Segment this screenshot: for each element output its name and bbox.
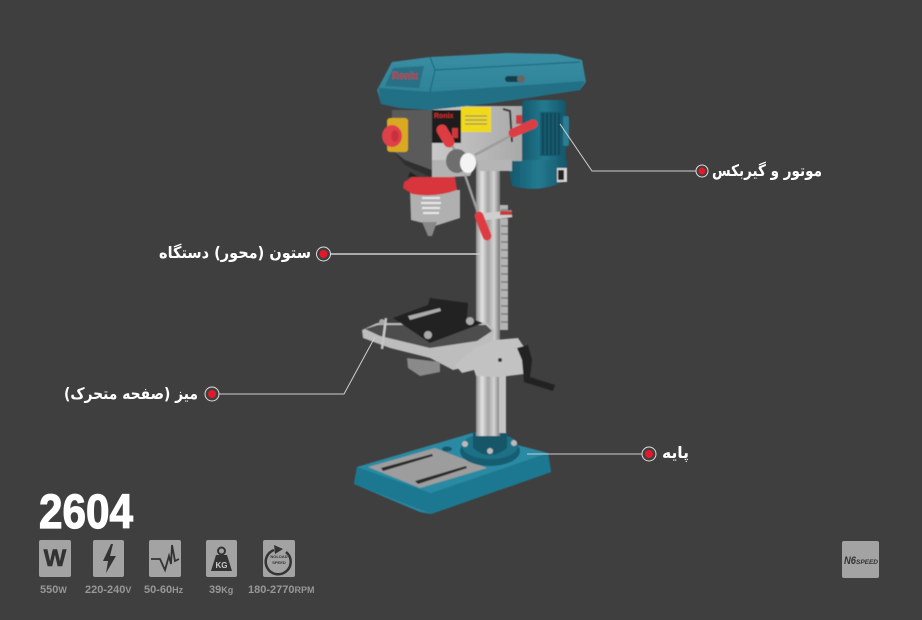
badge: N6 speed [842,541,879,578]
spec: weight: 39Kg [209,584,233,596]
spec: power [39,540,71,596]
callout: column: ستون (محور) دستگاه [159,243,311,262]
badge: N6 speed: N6 [844,555,857,567]
callout: table: میز (صفحه متحرک) [64,384,198,403]
spec: power: 550W [40,584,67,596]
model number: 2604 [39,486,133,539]
spec: power: W [44,545,67,572]
switch [382,118,408,152]
top cover: Ronix [392,71,418,82]
warning labels: Ronix [434,113,454,120]
head body [392,106,522,178]
drill press product illustration [354,53,586,514]
chuck [403,172,460,236]
logo [385,66,424,88]
top cover [377,53,586,110]
callout: base: پایه [662,443,689,463]
spec: speed: NOLOAD [270,554,288,559]
base [354,432,551,514]
table and vise [362,298,555,391]
spec: voltage: 220-240V [85,584,131,596]
handles [442,115,533,236]
callout: motor and gearbox: موتور و گیربکس [712,161,822,180]
motor [509,100,569,189]
column [476,160,512,436]
spec: frequency [144,540,184,596]
spec: speed: 180-2770RPM [248,584,314,596]
spec: voltage [85,540,131,596]
spec: speed: SPEED [272,560,286,565]
spec: frequency: 50-60Hz [144,584,184,596]
callout: base [642,443,689,463]
spec: speed [248,540,314,596]
spec: weight [206,540,237,596]
spec: weight: KG [216,561,228,570]
leader lines [219,124,696,454]
badge: N6 speed: SPEED [856,560,879,566]
